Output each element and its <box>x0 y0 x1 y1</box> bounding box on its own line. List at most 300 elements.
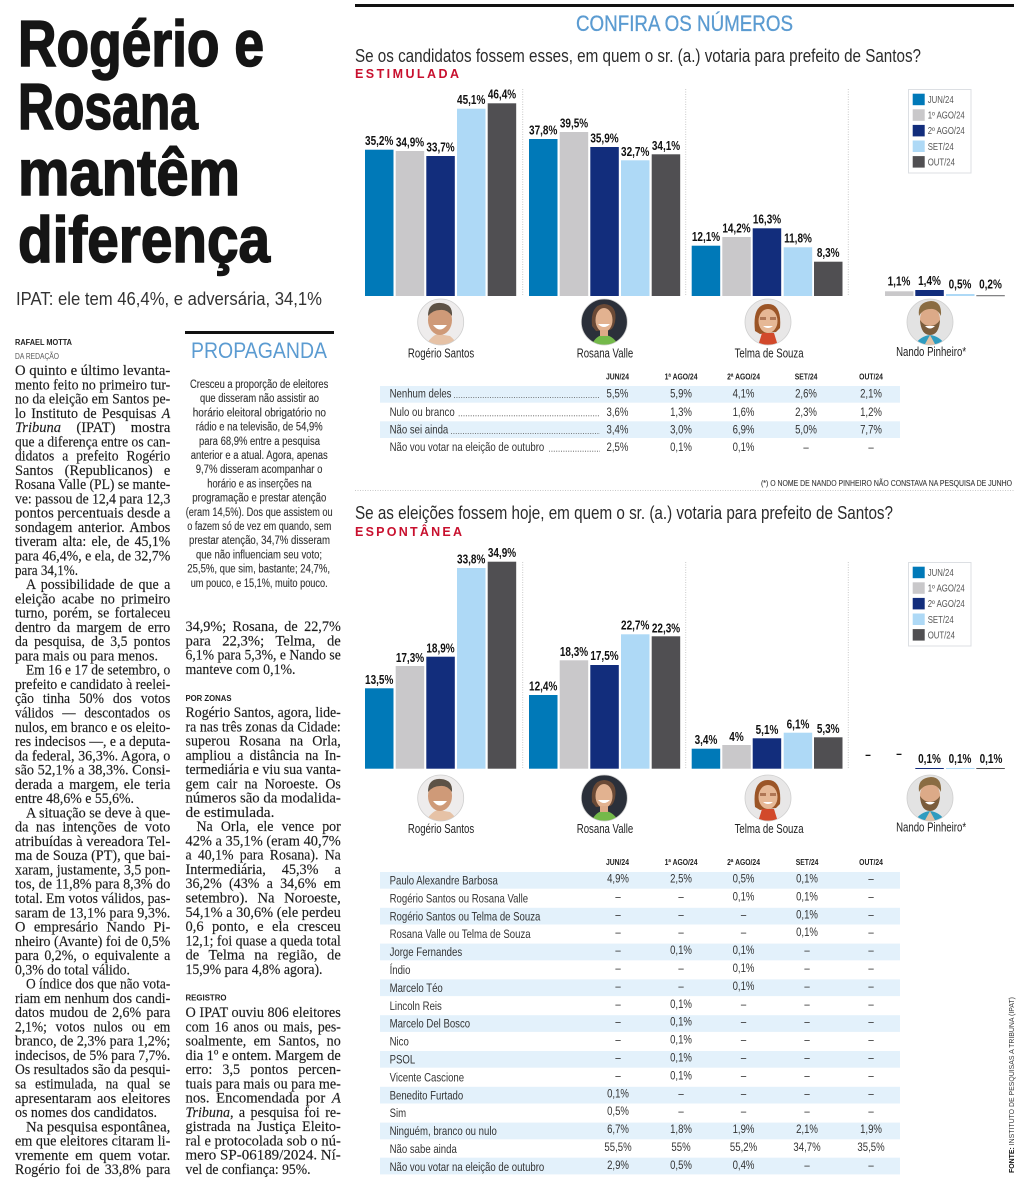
table: espontanea other answers: – <box>868 1159 875 1172</box>
legend 1: SET/24 <box>928 141 954 152</box>
legend 1: 1º AGO/24 <box>928 110 965 121</box>
table: espontanea other answers: – <box>678 980 685 993</box>
article text: first column: tiveram alta: ele, de 45,1% <box>15 534 170 550</box>
article text: second column: Tribuna, a pesquisa foi re- <box>186 1105 341 1121</box>
candidates: estimulada: Rosana Valle <box>577 347 633 361</box>
table: espontanea other answers: 0,1% <box>796 908 818 922</box>
propaganda text: horário eleitoral obrigatório no <box>193 407 326 419</box>
article text: second column: a 40,1% para Rosana). Na <box>186 848 341 864</box>
article text: first column: ma de Souza (PT), que bai- <box>15 848 170 864</box>
article text: first column: eleição acabe no primeiro <box>15 591 170 607</box>
table: estimulada other answers: 3,6% <box>606 406 629 419</box>
article text: second column: 15,9% para 4,8% agora). <box>186 962 322 978</box>
article text: first column: entre 48,6% e 55,6%. <box>15 791 134 807</box>
propaganda text: (eram 14,5%). Dos que assistem ou <box>186 507 333 519</box>
bars: Nando Pinheiro <box>885 275 1005 296</box>
table: espontanea other answers: – <box>741 1069 747 1083</box>
table: espontanea other answers: 35,5% <box>857 1141 885 1154</box>
table: espontanea other answers: 6,7% <box>607 1123 629 1136</box>
article text: second column: gistrada na Justiça Eleito- <box>186 1119 341 1135</box>
bars: Nando Pinheiro: 0,5% <box>949 279 971 292</box>
bars: Nando Pinheiro: 0,1% <box>949 753 971 766</box>
table: estimulada other answers: 1ª AGO/24 <box>665 372 698 382</box>
table: espontanea other answers: Paulo Alexandre Barbosa <box>390 875 499 888</box>
article text: first column: res indecisos —, e a deputa- <box>15 734 170 750</box>
table: espontanea other answers: 0,1% <box>670 1069 692 1083</box>
table: espontanea other answers: – <box>615 1034 622 1047</box>
article text: first column <box>15 363 171 1178</box>
article text: first column: ve: passou de 12,4 para 12,3 <box>15 491 170 507</box>
bars: Rosana Valle: 22,7% <box>621 620 649 633</box>
article text: second column: Na Orla, ele vence por <box>196 819 341 835</box>
article text: first column: Em 16 e 17 de setembro, o <box>26 663 170 679</box>
article text: first column: O índice dos que não vota- <box>26 977 170 993</box>
byline <box>15 338 72 361</box>
table: espontanea other answers: 1,8% <box>670 1123 692 1136</box>
panel: propaganda sidebar <box>185 331 334 590</box>
article text: first column: tos, de 11,8% para 8,3% do <box>15 877 170 893</box>
bars: Rogério Santos: 45,1% <box>457 94 485 107</box>
propaganda text: horário e as inserções na <box>207 478 312 490</box>
article text: second column: superou Rosana na Orla, <box>186 734 341 750</box>
table: espontanea other answers: 0,1% <box>670 998 692 1011</box>
table: estimulada other answers: 5,0% <box>795 424 817 437</box>
article text: first column: da pesquisa, de 3,5 pontos <box>15 634 170 650</box>
candidates: espontanea: Telma de Souza <box>735 823 804 836</box>
article text: first column: Rogério foi de 33,8% para <box>15 1162 171 1178</box>
article text: second column: setembro). Na Noroeste, <box>186 890 341 906</box>
article text: second column: números são da modalida- <box>186 791 341 807</box>
bars: Telma de Souza: 16,3% <box>753 214 781 227</box>
legend 1: OUT/24 <box>928 156 955 168</box>
table: estimulada other answers: 1,6% <box>733 406 755 419</box>
table: espontanea other answers: – <box>615 1052 622 1065</box>
article text: first column: válidos — descontados os <box>15 706 170 722</box>
bars: Telma de Souza: 4% <box>729 731 744 744</box>
article text: second column: de estimulada. <box>186 805 274 821</box>
bars: Telma de Souza <box>692 214 842 296</box>
table: espontanea other answers: 0,4% <box>733 1159 755 1172</box>
article text: second column: 12,1; foi quase a queda total <box>186 933 341 949</box>
table: espontanea other answers: – <box>804 1159 811 1172</box>
table: espontanea other answers: – <box>868 980 875 993</box>
table: espontanea other answers: Lincoln Reis <box>390 1000 442 1013</box>
bars: Rogério Santos: 17,3% <box>396 652 424 665</box>
propaganda text: Cresceu a proporção de eleitores <box>190 379 328 391</box>
bars: Rosana Valle: 32,7% <box>621 146 649 159</box>
table: estimulada other answers: Não vou votar na eleição de outubro <box>390 441 544 455</box>
article text: first column: sondagem anterior. Ambos <box>15 520 170 536</box>
table: espontanea other answers: Não vou votar na eleição de outubro <box>390 1161 544 1174</box>
article text: second column: 34,9%; Rosana, de 22,7% <box>186 619 341 635</box>
table: espontanea other answers: – <box>804 1034 811 1047</box>
legend 2: SET/24 <box>928 614 954 625</box>
article text: first column: para 46,4%, e ela, de 32,7% <box>15 548 170 564</box>
table: espontanea other answers: – <box>804 1052 811 1065</box>
table: espontanea other answers: – <box>615 980 622 993</box>
headline: diferença <box>18 203 271 276</box>
article text: second column <box>186 619 342 1178</box>
article text: first column: branco, de 2,3% para 1,2%; <box>15 1034 170 1050</box>
bars: Rosana Valle: 17,5% <box>590 650 619 663</box>
table: espontanea other answers <box>380 857 900 1174</box>
table: espontanea other answers: – <box>615 908 622 922</box>
bars: Rosana Valle: 39,5% <box>560 118 588 131</box>
article text: first column: 0,3% do total válido. <box>15 962 130 978</box>
article text: second column: Rogério Santos, agora, lide- <box>186 705 341 721</box>
article text: first column: didatos a prefeito Rogério <box>15 449 170 465</box>
table: espontanea other answers: – <box>868 962 875 975</box>
article text: second column: 54,1% a 30,6% (ele perdeu <box>186 905 341 921</box>
table: espontanea other answers: – <box>868 1052 875 1065</box>
subheading: por zonas: POR ZONAS <box>186 694 232 703</box>
candidates: espontanea: Nando Pinheiro* <box>896 821 967 835</box>
propaganda text <box>186 379 333 590</box>
table: espontanea other answers: 0,1% <box>670 1016 692 1029</box>
portrait: Nando Pinheiro <box>907 299 955 346</box>
question 2: Se as eleições fossem hoje, em quem o sr. (a.) votaria para prefeito de Santos? <box>355 502 893 523</box>
bars: Telma de Souza: 6,1% <box>787 719 809 732</box>
label: estimulada: ESTIMULADA <box>355 67 459 81</box>
table: estimulada other answers <box>380 372 900 455</box>
table: espontanea other answers: 0,1% <box>733 944 755 957</box>
bars: Nando Pinheiro: 0,2% <box>979 279 1002 292</box>
bars: Rosana Valle <box>529 118 680 296</box>
article text: first column: datos mudou de 2,6% para <box>15 1005 171 1021</box>
table: espontanea other answers: 2,5% <box>670 873 692 886</box>
article text: first column: dentro da margem de erro <box>15 620 170 636</box>
table: estimulada other answers: 5,5% <box>606 388 629 401</box>
table: espontanea other answers: – <box>804 1105 811 1119</box>
candidates: espontanea: Rogério Santos <box>408 823 475 836</box>
table: espontanea other answers: PSOL <box>390 1054 415 1067</box>
table: espontanea other answers: 0,1% <box>670 1052 692 1065</box>
table: espontanea other answers: Ninguém, branco ou nulo <box>390 1125 497 1138</box>
propaganda heading: PROPAGANDA <box>191 338 327 363</box>
table: espontanea other answers: – <box>678 890 685 904</box>
table: estimulada other answers: SET/24 <box>795 372 818 382</box>
article text: second column: ampliou a distância na In- <box>186 748 341 764</box>
table: estimulada other answers: OUT/24 <box>859 372 884 382</box>
table: espontanea other answers: 1,9% <box>860 1123 882 1136</box>
table: espontanea other answers: – <box>868 1069 875 1083</box>
table: espontanea other answers: – <box>868 926 875 940</box>
propaganda text: anterior e a atual. Agora, apenas <box>191 450 328 462</box>
table: estimulada other answers: Nenhum deles <box>390 388 452 401</box>
bars: Nando Pinheiro: 1,4% <box>918 275 941 288</box>
candidates: estimulada: Rogério Santos <box>408 347 475 361</box>
bars: Rosana Valle: 22,3% <box>652 623 680 636</box>
table: espontanea other answers: – <box>804 962 811 975</box>
bars: Rogério Santos: 13,5% <box>365 674 393 687</box>
table: estimulada other answers: – <box>868 441 875 455</box>
table: espontanea other answers: – <box>804 1069 811 1083</box>
article text: first column: xaram, justamente, 3,5 pon- <box>15 862 170 878</box>
table: espontanea other answers: – <box>678 1087 685 1101</box>
table: espontanea other answers: – <box>804 1087 811 1101</box>
table: espontanea other answers: – <box>741 908 747 922</box>
propaganda text: rádio e na televisão, de 54,9% <box>196 422 323 434</box>
table: espontanea other answers: – <box>868 890 875 904</box>
article text: first column: 2,1%; votos nulos ou em <box>15 1019 171 1035</box>
bars: Rosana Valle: 12,4% <box>529 681 557 694</box>
table: espontanea other answers: – <box>678 962 685 975</box>
table: estimulada other answers: JUN/24 <box>606 372 630 382</box>
table: estimulada other answers: 2,6% <box>795 388 817 401</box>
table: estimulada other answers: 2,1% <box>860 388 882 401</box>
table: espontanea other answers: Rosana Valle ou Telma de Souza <box>390 928 531 942</box>
article text: second column: Intermediária, 45,3% a <box>186 862 341 878</box>
article text: first column: A situação se deve à que- <box>26 805 170 821</box>
byline: RAFAEL MOTTA <box>15 338 72 347</box>
table: espontanea other answers: 2,1% <box>796 1123 818 1136</box>
table: espontanea other answers: – <box>678 908 685 922</box>
top rule <box>355 4 1014 7</box>
table: espontanea other answers: 0,1% <box>670 944 692 957</box>
table: espontanea other answers: Jorge Fernandes <box>390 946 463 959</box>
legend 1: 2º AGO/24 <box>928 125 965 136</box>
article text: first column: para mais ou para menos. <box>15 648 158 664</box>
table: espontanea other answers: Benedito Furtado <box>390 1089 463 1103</box>
propaganda text: que não influenciam seu voto; <box>196 549 322 561</box>
label: espontanea: ESPONTÂNEA <box>355 524 462 539</box>
table: estimulada other answers: 0,1% <box>670 441 692 455</box>
article text: second column: ra nas três zonas da Cidade: <box>186 719 341 735</box>
table: espontanea other answers: – <box>615 962 622 975</box>
article text: first column: derada a margem, ele teria <box>15 777 171 793</box>
bars: Nando Pinheiro: 1,1% <box>888 276 910 289</box>
table: espontanea other answers: – <box>804 1016 811 1029</box>
table: espontanea other answers: 0,1% <box>733 890 755 904</box>
table: espontanea other answers: – <box>741 1052 747 1065</box>
headline: mantêm <box>18 136 240 209</box>
article text: second column: 0,6 ponto, e ela cresceu <box>186 919 341 935</box>
article text: first column: atribuídas à vereadora Tel- <box>15 834 170 850</box>
propaganda text: 9,7% disseram acompanhar o <box>196 464 322 476</box>
table: espontanea other answers: – <box>615 890 622 904</box>
article text: first column: O empresário Nando Pi- <box>15 920 170 936</box>
table: espontanea other answers: – <box>868 908 875 922</box>
bars: Telma de Souza: 5,3% <box>817 723 840 736</box>
propaganda text: que disseram não assistir ao <box>200 393 319 405</box>
article text: first column: riam em nenhum dos candi- <box>15 991 170 1007</box>
table: estimulada other answers: Nulo ou branco <box>390 406 455 419</box>
article text: first column: nheiro (Avante) foi de 0,5% <box>15 934 170 950</box>
table: espontanea other answers: 4,9% <box>607 873 629 886</box>
article text: first column: vremente em quem votar. <box>15 1148 170 1164</box>
article text: first column: lo Instituto de Pesquisas A <box>15 406 171 422</box>
article text: first column: Tribuna (IPAT) mostra <box>15 420 171 436</box>
candidates: estimulada: Telma de Souza <box>735 347 804 361</box>
table: espontanea other answers: – <box>615 944 622 957</box>
article text: second column: 36,2% (43% a 34,6% em <box>186 876 341 892</box>
subheading: registro: REGISTRO <box>186 994 226 1003</box>
subtitle: IPAT: ele tem 46,4%, e adversária, 34,1% <box>16 288 322 309</box>
table: espontanea other answers: – <box>741 1087 747 1101</box>
bars: Telma de Souza: 11,8% <box>784 233 812 246</box>
article text: first column: prefeito e candidato à reelei- <box>15 677 170 693</box>
table: estimulada other answers: 4,1% <box>733 388 755 401</box>
article text: first column: que a diferença entre os can- <box>15 434 170 450</box>
article text: first column: saram de 13,1% para 9,3%. <box>15 905 170 921</box>
table: espontanea other answers: – <box>741 1105 747 1119</box>
bars: Rogério Santos: 33,8% <box>457 554 485 567</box>
article text: first column: Os resultados são da pesqui- <box>15 1062 170 1078</box>
bars: Rogério Santos: 34,9% <box>488 547 516 560</box>
article text: first column: mento feito no primeiro tur- <box>15 377 170 393</box>
propaganda text: um pouco, e 15,1%, muito pouco. <box>191 578 328 590</box>
table: espontanea other answers: – <box>741 926 747 940</box>
bars: Rogério Santos <box>365 89 516 296</box>
portrait: Rogério Santos <box>417 775 465 822</box>
propaganda text: prestar atenção, 34,7% disseram <box>189 535 330 547</box>
article text: second column: tuais para mais ou para me- <box>186 1076 341 1092</box>
source note: FONTE: INSTITUTO DE PESQUISAS A TRIBUNA (IPAT) <box>1009 997 1016 1173</box>
article text: second column: de Telma na região, de <box>186 948 341 964</box>
candidates: espontanea: Rosana Valle <box>577 823 633 836</box>
table: espontanea other answers: 34,7% <box>793 1141 821 1154</box>
article text: second column: vel de confiança: 95%. <box>186 1162 310 1178</box>
table: espontanea other answers: Não sabe ainda <box>390 1143 458 1156</box>
article text: first column: indecisos, de 5% para 7,7%. <box>15 1048 170 1064</box>
table: espontanea other answers: Nico <box>390 1036 409 1049</box>
table: espontanea other answers: 55,2% <box>730 1141 757 1154</box>
table: espontanea other answers: Vicente Cascione <box>390 1071 464 1085</box>
table: estimulada other answers: 1,3% <box>670 406 692 419</box>
table: espontanea other answers: OUT/24 <box>859 857 884 867</box>
bars: Rogério Santos <box>365 547 516 769</box>
article text: first column: A possibilidade de que a <box>26 577 171 593</box>
table: espontanea other answers: Marcelo Téo <box>390 982 443 995</box>
portrait: Telma de Souza <box>745 775 793 822</box>
table: espontanea other answers: 0,1% <box>670 1034 692 1047</box>
bar chart: estimulada <box>365 89 1005 296</box>
bars: Nando Pinheiro: 0,1% <box>918 753 941 766</box>
table: espontanea other answers: – <box>804 998 811 1011</box>
table: estimulada other answers: – <box>803 441 810 455</box>
byline: DA REDAÇÃO <box>15 351 59 361</box>
article text: first column: apresentaram aos eleitores <box>15 1091 170 1107</box>
table: espontanea other answers: 1ª AGO/24 <box>665 857 698 867</box>
legend 2: 1º AGO/24 <box>928 583 965 594</box>
table: espontanea other answers: Índio <box>390 963 410 977</box>
bars: Rosana Valle: 35,9% <box>590 133 619 146</box>
table: espontanea other answers: 0,5% <box>607 1105 629 1119</box>
article text: first column: Santos (Republicanos) e <box>15 463 171 479</box>
bars: Nando Pinheiro: – <box>896 748 902 761</box>
bars: Telma de Souza: 8,3% <box>817 247 840 260</box>
portrait: Telma de Souza <box>745 299 793 346</box>
section heading: CONFIRA OS NÚMEROS <box>576 11 793 36</box>
table: estimulada other answers: 0,1% <box>733 441 755 455</box>
article text: first column: nulos, em branco e os eleito- <box>15 720 170 736</box>
article text: second column: 42% a 35,1% (eram 40,7% <box>186 833 341 849</box>
table: espontanea other answers: 0,1% <box>796 873 818 886</box>
table: estimulada other answers: 2,5% <box>606 441 629 455</box>
table: espontanea other answers: 0,1% <box>607 1087 629 1101</box>
table: espontanea other answers: – <box>868 1034 875 1047</box>
article text: first column: sa estimulada, na qual se <box>15 1076 171 1092</box>
table: espontanea other answers: 2ª AGO/24 <box>727 857 761 867</box>
bar chart: espontanea <box>365 547 1005 769</box>
candidates: espontanea <box>408 775 967 836</box>
table: espontanea other answers: SET/24 <box>796 857 819 867</box>
legend 2: OUT/24 <box>928 629 955 641</box>
article text: second column: erro: 3,5 pontos percen- <box>186 1062 341 1078</box>
candidates: estimulada <box>408 299 967 361</box>
table: espontanea other answers: – <box>868 944 875 957</box>
table: estimulada other answers: 3,4% <box>606 424 629 437</box>
portrait: Rosana Valle <box>581 299 629 346</box>
article text: second column: termediária e viu sua vanta- <box>186 762 341 778</box>
table: espontanea other answers: – <box>741 1016 747 1029</box>
table: espontanea other answers: – <box>741 1034 747 1047</box>
table: espontanea other answers: 55,5% <box>604 1141 632 1154</box>
bars: Rogério Santos: 46,4% <box>488 89 516 102</box>
headline <box>18 7 271 276</box>
bars: Rogério Santos: 34,9% <box>396 137 424 150</box>
legend 2: 2º AGO/24 <box>928 598 965 609</box>
table: espontanea other answers: – <box>678 1105 685 1119</box>
table: estimulada other answers: 6,9% <box>733 424 755 437</box>
bars: Nando Pinheiro <box>865 748 1005 769</box>
table: espontanea other answers: – <box>741 998 747 1011</box>
table: espontanea other answers: 0,1% <box>733 980 755 993</box>
table: espontanea other answers: 0,1% <box>796 926 818 940</box>
bars: Rogério Santos: 33,7% <box>426 142 455 155</box>
table: espontanea other answers: JUN/24 <box>606 857 630 867</box>
bars: Rosana Valle <box>529 620 680 769</box>
table: espontanea other answers: – <box>868 1087 875 1101</box>
bars: Telma de Souza: 14,2% <box>722 223 751 236</box>
article text: second column: manteve com 0,1%. <box>186 662 296 678</box>
article text: first column: total. Em votos válidos, pas- <box>15 891 170 907</box>
table: espontanea other answers: – <box>678 926 685 940</box>
article text: second column: O IPAT ouviu 806 eleitores <box>186 1005 341 1021</box>
bars: Rogério Santos: 35,2% <box>365 135 393 148</box>
propaganda text: 25,5%, que sim, bastante; 24,7%, <box>187 564 330 576</box>
article text: first column: para 34,1%. <box>15 563 78 579</box>
legend 2: JUN/24 <box>928 567 954 578</box>
article text: second column: para 22,3%; Telma, de <box>186 633 341 649</box>
table: espontanea other answers: 0,1% <box>733 962 755 975</box>
table: espontanea other answers: 0,1% <box>796 890 818 904</box>
article text: first column: pontos percentuais desde a <box>15 506 171 522</box>
bars: Telma de Souza: 5,1% <box>756 724 778 737</box>
bars: Rosana Valle: 34,1% <box>652 140 680 153</box>
article text: first column: no da eleição em Santos pe- <box>15 392 170 408</box>
article text: second column: gem cair na Noroeste. Os <box>186 776 341 792</box>
headline: Rosana <box>18 70 199 143</box>
article text: first column: Na pesquisa espontânea, <box>26 1119 170 1135</box>
article text: second column: dia 1º e ontem. Margem de <box>186 1048 341 1064</box>
article text: first column: os nomes dos candidatos. <box>15 1105 157 1121</box>
table: espontanea other answers: – <box>615 926 622 940</box>
table: espontanea other answers: – <box>868 873 875 886</box>
article text: first column: O quinto e último levanta- <box>15 363 170 379</box>
bars: Rosana Valle: 37,8% <box>529 125 557 138</box>
article text: second column: soalmente, em Santos, no <box>186 1034 341 1050</box>
candidates: estimulada: Nando Pinheiro* <box>896 346 967 359</box>
table: estimulada other answers: Não sei ainda <box>390 424 449 437</box>
article text: second column: 6,1% para 5,3%, e Nando se <box>186 648 341 664</box>
propaganda text: para 68,9% entre a pesquisa <box>199 436 320 448</box>
article text: first column: da federal, 36,3%. Agora, o <box>15 748 170 764</box>
table: espontanea other answers: – <box>804 944 811 957</box>
table: estimulada other answers: 1,2% <box>860 406 882 419</box>
bars: Nando Pinheiro: 0,1% <box>980 753 1002 766</box>
table: estimulada other answers: 2,3% <box>795 406 817 419</box>
